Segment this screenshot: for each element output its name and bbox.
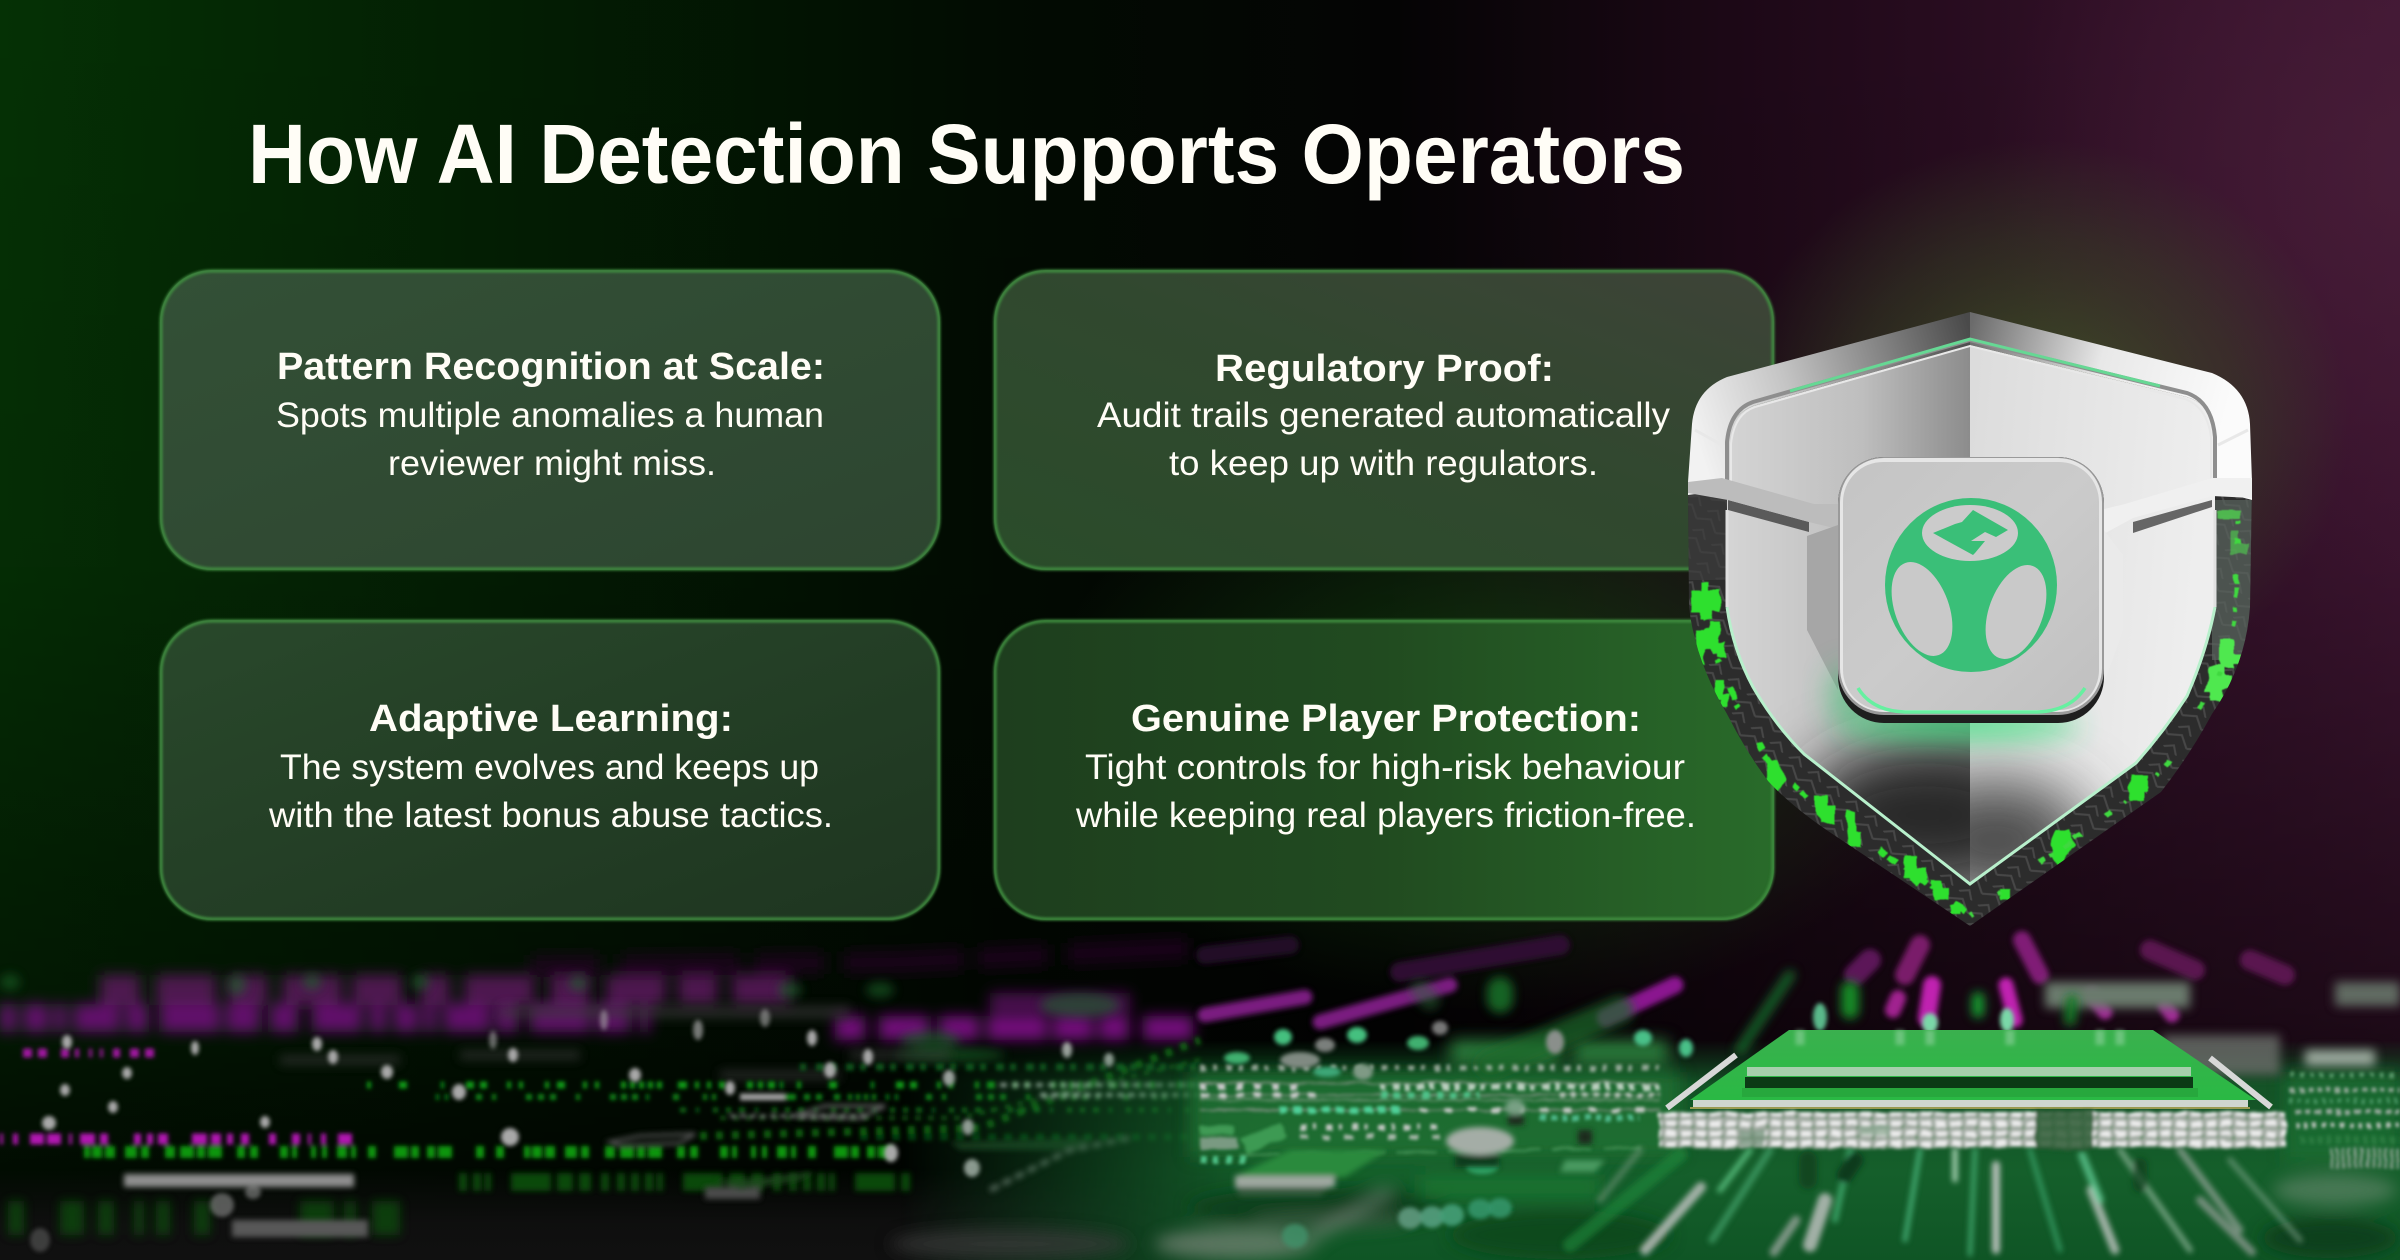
pale drops [30, 1009, 1114, 1252]
card body: with the latest bonus abuse tactics. [268, 796, 833, 835]
card body: while keeping real players friction-free. [1075, 796, 1696, 835]
card heading: Pattern Recognition at Scale: [277, 346, 825, 388]
card: Adaptive Learning [160, 620, 940, 920]
card: Regulatory Proof [994, 270, 1774, 570]
teal blobs and sphere [1224, 1003, 2014, 1248]
card body [268, 748, 833, 835]
shield inner face [1727, 345, 2215, 900]
centre tile [1838, 457, 2104, 723]
green board base [900, 1040, 2400, 1260]
gray blurred blocks [2045, 982, 2400, 1075]
bright green circuit patches [1692, 510, 2248, 915]
card: Pattern Recognition at Scale [160, 270, 940, 570]
icon: shield [1680, 312, 2260, 930]
faint gray smears [280, 1005, 950, 1080]
magenta and green dot rows [0, 1040, 1200, 1152]
dot rows and traces beside chip [1200, 1068, 2400, 1160]
logo: dice mark [1880, 498, 2058, 672]
card body: Audit trails generated automatically [1097, 396, 1671, 435]
glow under centre tile [1840, 714, 2080, 738]
circuit board: left side [0, 948, 1300, 1260]
title: How AI Detection Supports Operators [248, 107, 1685, 201]
shield rim with circuit texture [1680, 480, 2260, 930]
green glow strokes near chip [1420, 975, 2072, 1065]
green fringe on purple band [0, 974, 1120, 1062]
card body: The system evolves and keeps up [280, 748, 819, 787]
chip [1659, 1030, 2286, 1150]
circuit board: right side and chip [890, 940, 2400, 1260]
magenta streaks [1205, 940, 2285, 1022]
shield top frame [1688, 312, 2252, 500]
shield straps and brackets [1688, 478, 2252, 695]
card body: reviewer might miss. [388, 444, 716, 483]
card body: Spots multiple anomalies a human [276, 396, 824, 435]
purple band [0, 948, 1200, 1028]
card body [1075, 748, 1696, 835]
capacitor sphere [1446, 1099, 1592, 1167]
card body: Tight controls for high-risk behaviour [1085, 748, 1685, 787]
card body [276, 396, 824, 483]
radiating traces [1570, 1150, 2300, 1254]
card heading: Regulatory Proof: [1215, 348, 1554, 390]
card body: to keep up with regulators. [1169, 444, 1598, 483]
gray bars [124, 1106, 1130, 1237]
dark and gray out-of-focus patches [890, 1040, 2400, 1259]
card: Genuine Player Protection [994, 620, 1774, 920]
card heading: Genuine Player Protection: [1131, 698, 1641, 740]
card body [1097, 396, 1671, 483]
card heading: Adaptive Learning: [369, 698, 733, 740]
green pad and gray component [1233, 1150, 1605, 1196]
